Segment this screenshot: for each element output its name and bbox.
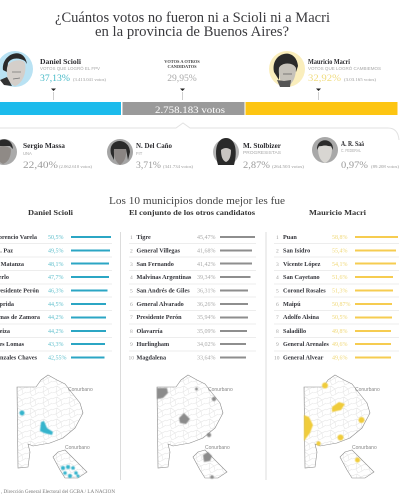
candidate: Mauricio Macri: VOTOS QUE LOGRÓ CAMBIEMOS xyxy=(308,66,381,71)
icon: portrait of Massa xyxy=(0,139,17,165)
ranking: otros candidatos: 41,42% xyxy=(197,262,216,268)
ranking: otros candidatos: 35,09% xyxy=(197,329,216,335)
ranking: otros candidatos: 34,02% xyxy=(197,342,216,348)
candidate: Mauricio Macri xyxy=(269,51,381,87)
stacked vote bar: 2.758.183 votos xyxy=(155,105,225,116)
title: en la provincia de Buenos Aires? xyxy=(95,24,289,40)
ranking: Macri: San Cayetano xyxy=(283,274,320,281)
candidate: M. Stolbizer: M. Stolbizer xyxy=(243,141,282,150)
ranking: Scioli: 46,3% xyxy=(48,288,64,294)
panel: other candidates outline xyxy=(0,123,399,140)
ranking: otros candidatos: 10 xyxy=(128,356,134,362)
ranking: otros candidatos: 45,47% xyxy=(197,235,216,241)
candidate: A. R. Saá: (89.208 votos) xyxy=(371,164,400,169)
ranking: Scioli: 43,3% xyxy=(48,342,64,348)
ranking: Macri: 9 xyxy=(276,342,279,348)
ranking: otros candidatos: 41,68% xyxy=(197,248,216,254)
candidate: Daniel Scioli: Daniel Scioli xyxy=(40,57,81,66)
candidate: other candidates total: CANDIDATOS xyxy=(167,64,197,69)
candidate: M. Stolbizer: 2,87% xyxy=(243,160,270,171)
ranking: otros candidatos: 1 xyxy=(130,235,133,241)
ranking: Macri: 5 xyxy=(276,288,279,294)
candidate: Daniel Scioli: VOTOS QUE LOGRÓ EL FPV xyxy=(40,66,100,71)
candidate: Daniel Scioli xyxy=(0,51,107,87)
ranking: Scioli xyxy=(0,234,111,362)
candidate: N. Del Caño: FIT xyxy=(136,151,143,156)
ranking: otros candidatos: 36,26% xyxy=(197,302,216,308)
ranking: Scioli: 44,5% xyxy=(48,302,64,308)
map: Macri: Conurbano xyxy=(355,387,380,393)
map: Scioli: Conurbano xyxy=(65,445,90,451)
ranking: Scioli: 44,2% xyxy=(48,329,64,335)
ranking: otros candidatos: Olavarría xyxy=(136,328,163,335)
candidate: N. Del Caño: (341.734 votos) xyxy=(163,164,194,169)
ranking: Macri: 7 xyxy=(276,315,279,321)
ranking: Scioli: 50,5% xyxy=(48,235,64,241)
ranking: Macri: 51,3% xyxy=(332,288,348,294)
ranking: otros candidatos: San Fernando xyxy=(136,261,174,268)
candidate: M. Stolbizer: (264.503 votos) xyxy=(272,164,305,169)
ranking: Scioli: 42,55% xyxy=(48,356,66,362)
ranking: Macri: 4 xyxy=(276,275,279,281)
ranking: otros candidatos xyxy=(128,234,255,362)
ranking: Macri: 58,8% xyxy=(332,235,348,241)
ranking: Macri: 1 xyxy=(276,235,279,241)
ranking: Macri: General Arenales xyxy=(283,341,329,348)
ranking: otros candidatos: 7 xyxy=(130,315,133,321)
ranking: Macri: 10 xyxy=(274,356,280,362)
candidate: N. Del Caño: 3,71% xyxy=(136,160,161,171)
icon: portrait of Stolbizer xyxy=(213,138,239,165)
ranking: Macri: Saladillo xyxy=(283,328,306,335)
pointers to the bar xyxy=(51,88,321,100)
map: Macri xyxy=(304,375,380,478)
candidate: Sergio Massa: UNA xyxy=(23,151,32,156)
ranking: otros candidatos: Magdalena xyxy=(136,354,166,362)
candidate: A. R. Saá: A. R. Saá xyxy=(341,139,364,148)
candidate: M. Stolbizer: PROGRESISTAS xyxy=(243,150,281,155)
map: otros candidatos: Conurbano xyxy=(205,445,230,451)
candidate: M. Stolbizer xyxy=(213,138,305,171)
section heading: Los 10 municipios donde mejor les fue xyxy=(109,195,285,207)
candidate: other candidates total xyxy=(164,59,200,84)
candidate: N. Del Caño xyxy=(107,139,194,171)
source note: , Dirección General Electoral del GCBA / LA NACION xyxy=(1,490,116,495)
candidate: N. Del Caño: N. Del Caño xyxy=(136,141,172,150)
ranking: Scioli: 47,7% xyxy=(48,275,64,281)
candidate: Mauricio Macri: 32,92% xyxy=(308,73,341,84)
ranking: otros candidatos: Malvinas Argentinas xyxy=(136,274,192,281)
ranking: Macri: 3 xyxy=(276,262,279,268)
ranking: otros candidatos: 35,94% xyxy=(197,315,216,321)
candidate: other candidates total: 29,95% xyxy=(167,73,197,84)
ranking: Macri: 50,87% xyxy=(332,302,350,308)
ranking: otros candidatos: General Alvarado xyxy=(136,301,184,308)
ranking: otros candidatos: 9 xyxy=(130,342,133,348)
icon: portrait of Saá xyxy=(312,137,338,163)
title: ¿Cuántos votos no fueron ni a Scioli ni a Macri xyxy=(55,10,330,26)
ranking: Macri: Vicente López xyxy=(283,261,321,268)
candidate: A. R. Saá: 0,97% xyxy=(341,160,368,171)
ranking: otros candidatos: 33,64% xyxy=(197,356,216,362)
candidate: Sergio Massa: (2.062.610 votos) xyxy=(59,164,93,169)
map: Scioli: Conurbano xyxy=(68,387,93,393)
map: Scioli xyxy=(17,375,93,478)
candidate: Daniel Scioli: 37,13% xyxy=(40,73,70,84)
ranking: Macri: Adolfo Alsina xyxy=(283,314,319,321)
column heading: Mauricio Macri: Mauricio Macri xyxy=(309,208,367,217)
candidate: Sergio Massa xyxy=(0,139,93,171)
column dividers and row rules xyxy=(0,232,399,480)
ranking: Scioli: 49,5% xyxy=(48,248,64,254)
ranking: otros candidatos: 8 xyxy=(130,329,133,335)
column heading: otros candidatos: El conjunto de los otros candidatos xyxy=(129,208,255,217)
candidate: A. R. Saá: C. FEDERAL xyxy=(341,148,362,153)
ranking: Macri: 50,5% xyxy=(332,315,348,321)
ranking: Macri xyxy=(274,234,398,362)
stacked vote bar xyxy=(0,102,398,116)
ranking: otros candidatos: Tigre xyxy=(136,234,151,241)
ranking: Macri: San Isidro xyxy=(283,248,310,254)
ranking: otros candidatos: Presidente Perón xyxy=(136,314,182,321)
ranking: Macri: 49,6% xyxy=(332,342,348,348)
candidate: Mauricio Macri: (3.03.165 votos) xyxy=(344,77,377,82)
ranking: otros candidatos: 36,31% xyxy=(197,288,216,294)
ranking: otros candidatos: 3 xyxy=(130,262,133,268)
icon: portrait of Del Caño xyxy=(107,139,133,165)
ranking: Macri: 55,4% xyxy=(332,248,348,254)
ranking: otros candidatos: 2 xyxy=(130,248,133,254)
candidate: other candidates total: VOTOS A OTROS xyxy=(164,59,200,64)
candidate: A. R. Saá xyxy=(312,137,400,171)
ranking: Macri: Coronel Rosales xyxy=(283,288,326,294)
icon: portrait of Scioli xyxy=(0,51,33,87)
map: Macri: Conurbano xyxy=(352,445,377,451)
candidate: Sergio Massa: Sergio Massa xyxy=(23,141,65,150)
ranking: Macri: 8 xyxy=(276,329,279,335)
map: otros candidatos: Conurbano xyxy=(208,387,233,393)
ranking: otros candidatos: General Villegas xyxy=(136,248,181,254)
ranking: Macri: 6 xyxy=(276,302,279,308)
ranking: otros candidatos: 4 xyxy=(130,275,133,281)
ranking: otros candidatos: 5 xyxy=(130,288,133,294)
ranking: otros candidatos: 6 xyxy=(130,302,133,308)
ranking: otros candidatos: Hurlingham xyxy=(136,341,170,348)
column heading: Daniel Scioli: Daniel Scioli xyxy=(28,208,74,217)
ranking: Macri: Maipú xyxy=(283,301,301,308)
ranking: Macri: Puan xyxy=(283,234,297,241)
ranking: Macri: 49,6% xyxy=(332,356,348,362)
ranking: Macri: 2 xyxy=(276,248,279,254)
candidate: Sergio Massa: 22,40% xyxy=(23,160,58,171)
candidate: Mauricio Macri: Mauricio Macri xyxy=(308,57,350,66)
ranking: Macri: General Alvear xyxy=(283,354,324,362)
ranking: Macri: 54,1% xyxy=(332,262,348,268)
title xyxy=(55,10,330,40)
candidate: Daniel Scioli: (3.413.041 votos) xyxy=(73,77,107,82)
ranking: Scioli: 44,2% xyxy=(48,315,64,321)
ranking: otros candidatos: San Andrés de Giles xyxy=(136,288,190,294)
map: otros candidatos xyxy=(157,375,233,479)
icon: portrait of Macri xyxy=(269,51,305,87)
ranking: Scioli: 48,1% xyxy=(48,262,64,268)
ranking: Macri: 51,6% xyxy=(332,275,348,281)
ranking: otros candidatos: 39,34% xyxy=(197,275,216,281)
ranking: Macri: 49,8% xyxy=(332,329,348,335)
